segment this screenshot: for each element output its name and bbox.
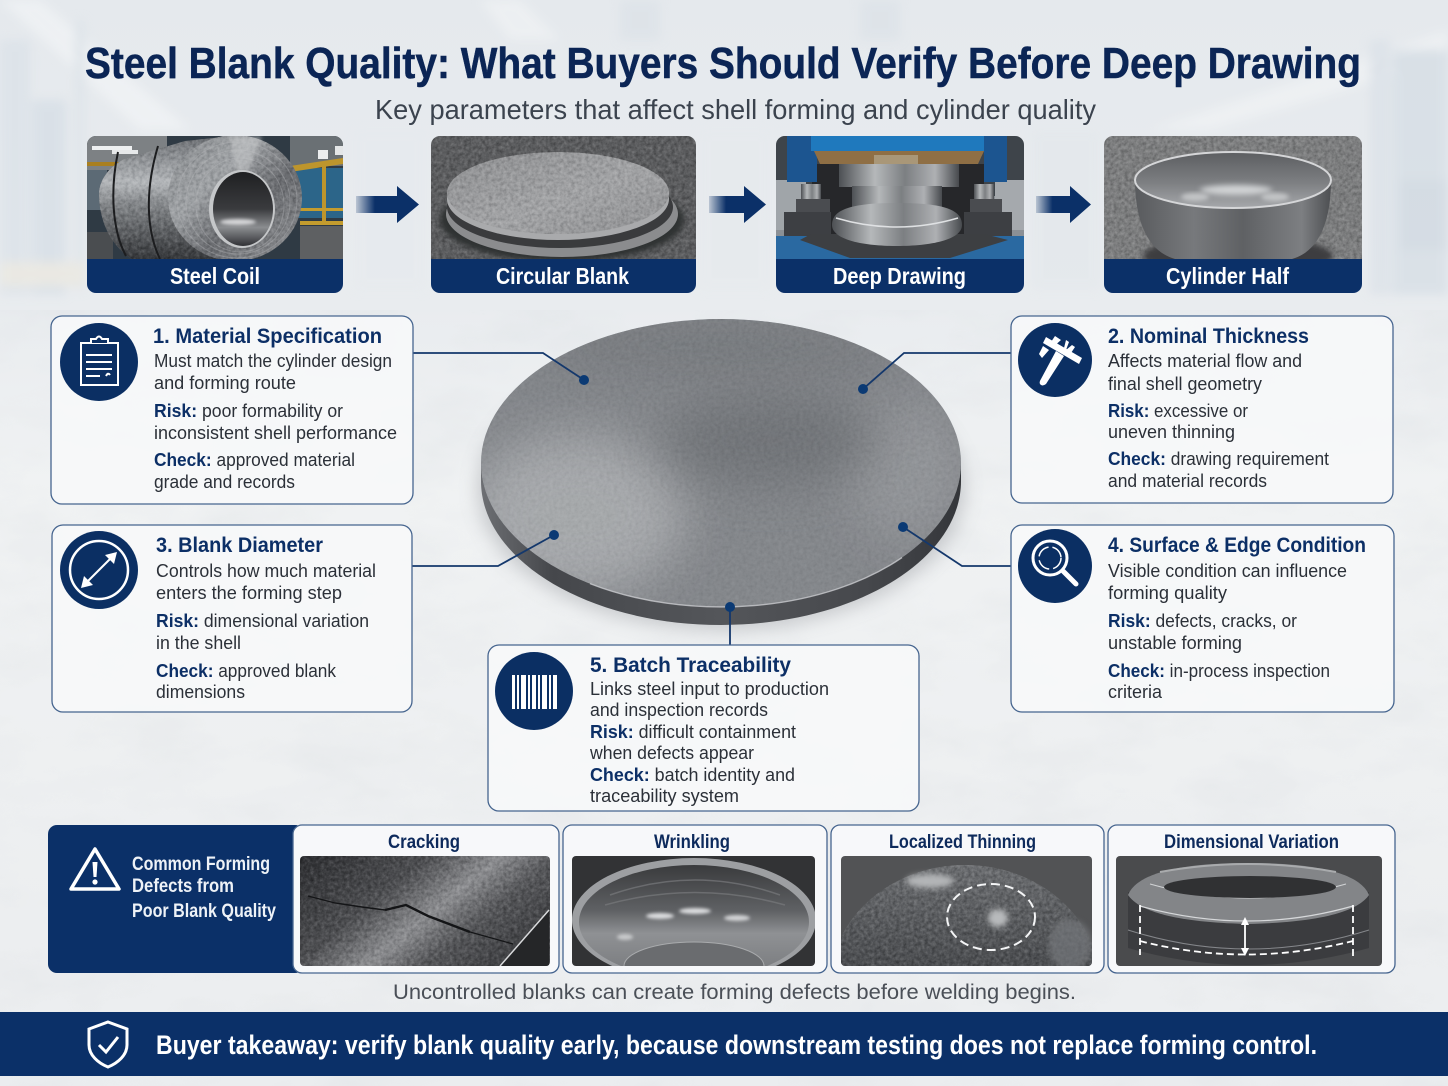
body text: Risk: defects, cracks, or xyxy=(1108,611,1297,631)
panel: 3 Blank Diameter xyxy=(52,525,412,712)
panel: common forming defects xyxy=(48,824,1396,974)
body text: criteria xyxy=(1108,682,1163,702)
body text: dimensions xyxy=(156,682,245,702)
body text: Must match the cylinder design xyxy=(154,351,392,371)
caption: Cylinder Half xyxy=(1166,263,1289,289)
defect card: Cracking: Cracking xyxy=(388,832,460,853)
defect card: Wrinkling xyxy=(563,825,827,990)
caption: Steel Coil xyxy=(170,263,260,289)
body text: unstable forming xyxy=(1108,633,1242,653)
process step: Deep Drawing xyxy=(776,136,1024,293)
body text xyxy=(156,561,376,702)
body text: Controls how much material xyxy=(156,561,376,581)
heading: 5. Batch Traceability xyxy=(590,654,791,677)
defects label text xyxy=(132,854,276,922)
subtitle: Key parameters that affect shell forming and cylinder quality xyxy=(375,94,1096,125)
body text xyxy=(589,679,829,806)
panel: 2 Nominal Thickness xyxy=(1011,316,1393,503)
heading: 3. Blank Diameter xyxy=(156,534,323,557)
body text: and inspection records xyxy=(590,700,768,720)
body text: Risk: excessive or xyxy=(1108,401,1248,421)
defects label block xyxy=(48,825,304,973)
icon: magnifier xyxy=(1018,529,1092,603)
defects label text: Defects from xyxy=(132,876,234,897)
body text: Risk: dimensional variation xyxy=(156,611,369,631)
body text: when defects appear xyxy=(589,743,754,763)
process step: Steel Coil xyxy=(87,135,343,293)
body text xyxy=(1108,561,1347,702)
heading: 2. Nominal Thickness xyxy=(1108,325,1309,348)
defects label text: Poor Blank Quality xyxy=(132,901,276,922)
note line: Uncontrolled blanks can create forming defects before welding begins. xyxy=(393,981,1076,1004)
icon: clipboard xyxy=(60,323,138,401)
arrow xyxy=(356,186,419,223)
body text: inconsistent shell performance xyxy=(154,423,397,443)
icon: diameter circle xyxy=(60,531,138,609)
connector lines xyxy=(412,353,1011,645)
body text: Visible condition can influence xyxy=(1108,561,1347,581)
body text: and material records xyxy=(1108,471,1267,491)
defect card: Wrinkling: Wrinkling xyxy=(654,832,730,853)
process step: Circular Blank xyxy=(431,136,696,293)
central steel blank disc xyxy=(465,319,965,630)
body text: Risk: difficult containment xyxy=(590,722,796,742)
body text xyxy=(154,351,397,492)
body text: Check: in-process inspection xyxy=(1108,661,1330,681)
body text: Check: batch identity and xyxy=(590,765,795,785)
body text: Check: approved material xyxy=(154,450,355,470)
panel: 4 Surface and Edge Condition xyxy=(1011,525,1394,712)
body text: Links steel input to production xyxy=(590,679,829,699)
icon: warning triangle xyxy=(71,849,119,889)
defect card: Dimensional Variation xyxy=(1108,825,1395,973)
defect card: Cracking xyxy=(293,825,559,973)
heading: 4. Surface & Edge Condition xyxy=(1108,534,1366,557)
caption: Circular Blank xyxy=(496,263,629,289)
body text: Risk: poor formability or xyxy=(154,401,343,421)
body text: Affects material flow and xyxy=(1108,351,1302,371)
process step: Cylinder Half xyxy=(1104,136,1362,293)
body text: Check: drawing requirement xyxy=(1108,449,1329,469)
heading: 1. Material Specification xyxy=(153,325,382,348)
defect card: Localized Thinning xyxy=(830,824,1105,974)
body text: forming quality xyxy=(1108,583,1227,603)
caption: Deep Drawing xyxy=(833,263,966,289)
body text: and forming route xyxy=(154,373,296,393)
icon: barcode xyxy=(495,652,573,730)
defect card: Dimensional Variation: Dimensional Variation xyxy=(1164,832,1339,853)
body text: uneven thinning xyxy=(1108,422,1235,442)
arrow xyxy=(1036,186,1091,223)
body text: in the shell xyxy=(156,633,241,653)
defect card: Localized Thinning: Localized Thinning xyxy=(889,832,1036,853)
body text: traceability system xyxy=(590,786,739,806)
icon: shield xyxy=(89,1022,127,1067)
defects label text: Common Forming xyxy=(132,854,270,875)
body text xyxy=(1108,351,1329,491)
body text: Check: approved blank xyxy=(156,661,337,681)
icon: caliper xyxy=(1018,323,1092,397)
arrow xyxy=(709,186,766,223)
panel: 5 Batch Traceability xyxy=(488,645,919,811)
body text: enters the forming step xyxy=(156,583,342,603)
panel: 1 Material Specification xyxy=(51,316,413,504)
body text: grade and records xyxy=(154,472,295,492)
body text: final shell geometry xyxy=(1108,374,1262,394)
banner: buyer takeaway xyxy=(0,1012,1448,1076)
